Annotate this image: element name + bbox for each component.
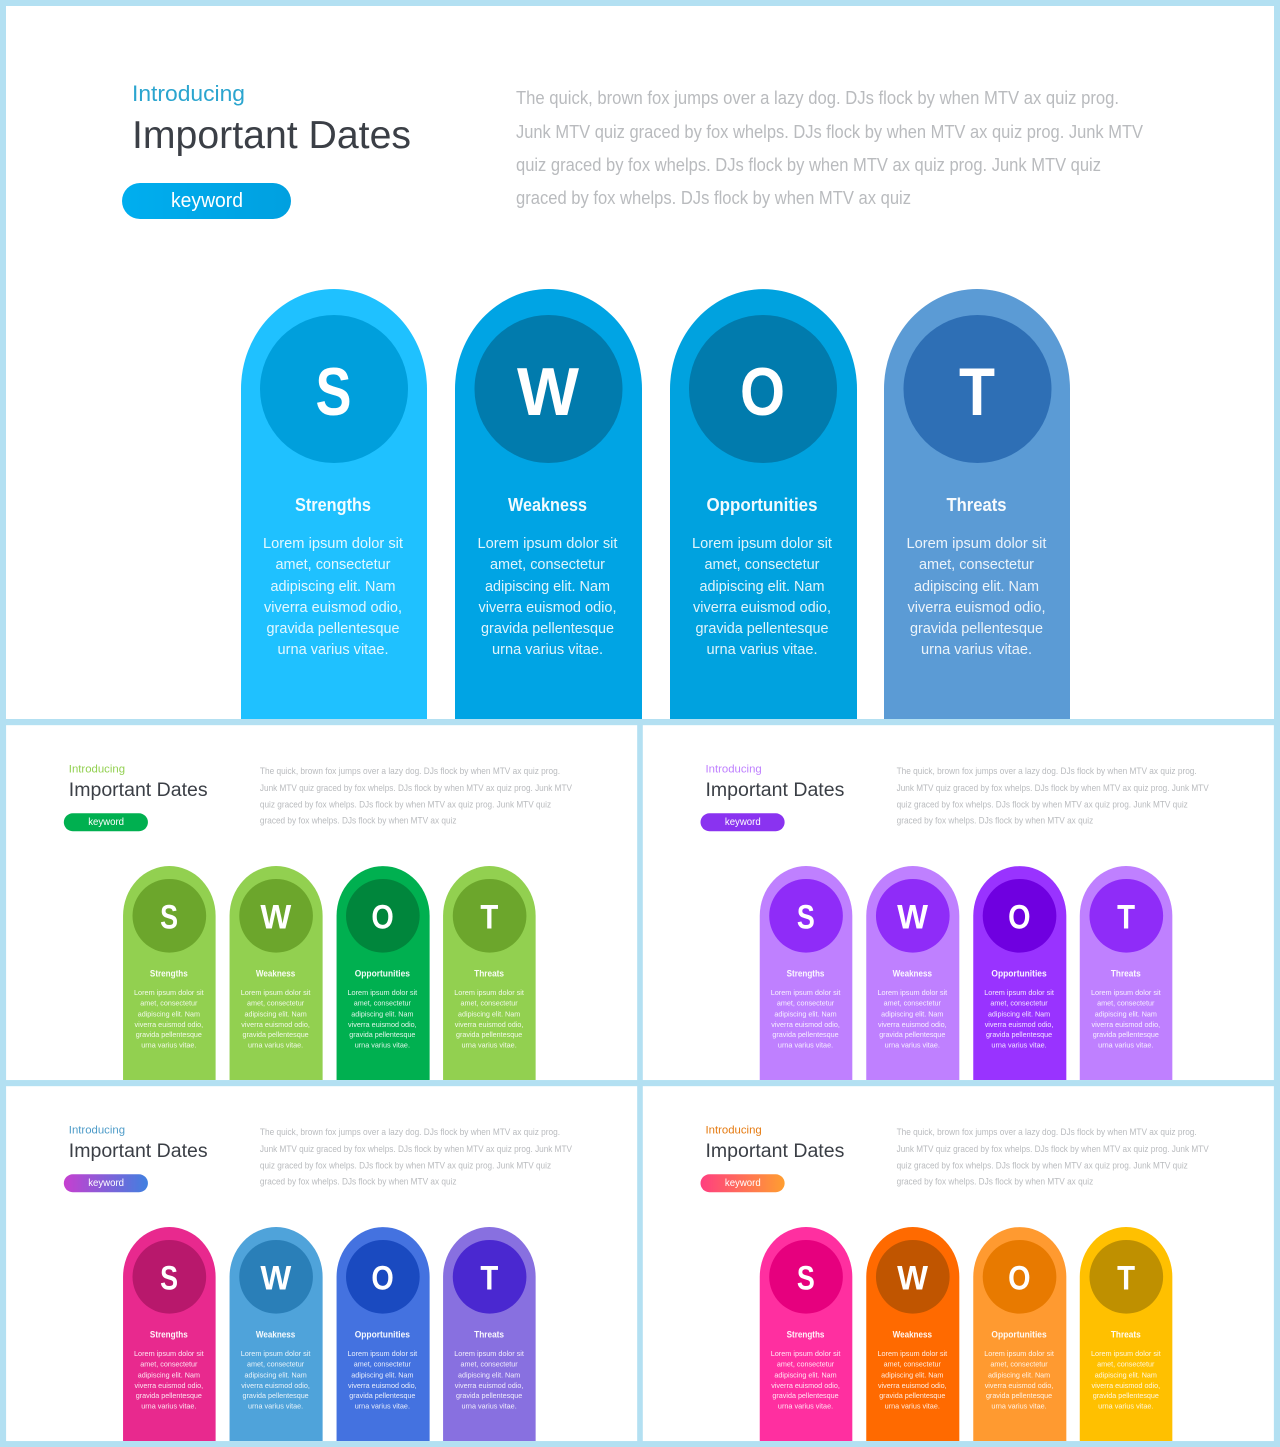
column: Opportunities: amet, consectetur <box>704 556 820 573</box>
column: Opportunities: Lorem ipsum dolor sit <box>692 535 833 552</box>
column: Threats: gravida pellentesque <box>1093 1391 1159 1400</box>
column: Opportunities: gravida pellentesque <box>986 1391 1052 1400</box>
column: Weakness: gravida pellentesque <box>879 1030 945 1039</box>
column: Weakness: W <box>260 899 291 937</box>
column: Opportunities: viverra euismod odio, <box>693 599 831 616</box>
column: Weakness: viverra euismod odio, <box>478 599 616 616</box>
column: Opportunities <box>670 289 857 719</box>
column: Weakness: urna varius vitae. <box>885 1402 940 1411</box>
column: Weakness: Lorem ipsum dolor sit <box>877 988 948 997</box>
column: Opportunities: Lorem ipsum dolor sit <box>984 988 1055 997</box>
column: Strengths: urna varius vitae. <box>278 641 388 658</box>
column: Weakness: adipiscing elit. Nam <box>485 578 610 595</box>
column: Opportunities: gravida pellentesque <box>986 1030 1052 1039</box>
column: Weakness: W <box>897 899 928 937</box>
intro paragraph <box>516 88 1143 208</box>
column: Weakness: Weakness <box>893 1330 932 1340</box>
column: Strengths: viverra euismod odio, <box>264 599 402 616</box>
column: Threats: Lorem ipsum dolor sit <box>906 535 1047 552</box>
label: Introducing: Introducing <box>69 763 125 775</box>
column: Threats: viverra euismod odio, <box>1091 1381 1160 1390</box>
column: Opportunities: O <box>371 1260 394 1298</box>
intro paragraph: Junk MTV quiz graced by fox whelps. DJs flock by when MTV ax quiz prog. Junk MTV <box>516 122 1143 142</box>
intro paragraph: quiz graced by fox whelps. DJs flock by when MTV ax quiz prog. Junk MTV quiz <box>897 1160 1188 1170</box>
intro paragraph: Junk MTV quiz graced by fox whelps. DJs flock by when MTV ax quiz prog. Junk MTV <box>260 1144 572 1154</box>
column: Weakness: gravida pellentesque <box>242 1391 309 1400</box>
column: Opportunities: viverra euismod odio, <box>348 1020 417 1029</box>
column: Opportunities <box>337 1227 430 1441</box>
column: Weakness <box>455 289 642 719</box>
column: Opportunities: Lorem ipsum dolor sit <box>348 988 418 997</box>
column: Opportunities: viverra euismod odio, <box>985 1020 1053 1029</box>
column: Threats: Lorem ipsum dolor sit <box>1091 1349 1162 1358</box>
column: Strengths: S <box>797 899 815 937</box>
column: Weakness: Weakness <box>508 495 587 515</box>
column: Weakness: gravida pellentesque <box>481 620 614 637</box>
column: Strengths: adipiscing elit. Nam <box>138 1009 200 1018</box>
keyword pill: keyword <box>88 1178 124 1189</box>
intro paragraph: quiz graced by fox whelps. DJs flock by when MTV ax quiz prog. Junk MTV quiz <box>516 155 1101 175</box>
panel: blue SWOT slide <box>6 6 1274 719</box>
column: Weakness <box>230 1227 323 1441</box>
column: Threats: Threats <box>946 495 1006 515</box>
column: Weakness: adipiscing elit. Nam <box>244 1009 307 1018</box>
column: Weakness <box>230 866 323 1080</box>
column: Weakness: viverra euismod odio, <box>241 1381 310 1390</box>
label: Introducing: Introducing <box>132 81 245 106</box>
heading: Important Dates: Important Dates <box>132 114 411 157</box>
column: Strengths: urna varius vitae. <box>778 1041 833 1050</box>
column: Weakness <box>866 1227 959 1441</box>
column: Strengths: gravida pellentesque <box>136 1030 202 1039</box>
column: Weakness <box>866 866 959 1080</box>
column: Strengths: S <box>797 1260 815 1298</box>
column: Opportunities: adipiscing elit. Nam <box>351 1370 413 1379</box>
column: Opportunities: Lorem ipsum dolor sit <box>984 1349 1055 1358</box>
column: Weakness: Lorem ipsum dolor sit <box>478 535 618 552</box>
column: Strengths: Lorem ipsum dolor sit <box>134 1349 205 1358</box>
column: Opportunities: adipiscing elit. Nam <box>351 1009 413 1018</box>
column: Threats: viverra euismod odio, <box>455 1381 523 1390</box>
column: Opportunities: adipiscing elit. Nam <box>988 1370 1050 1379</box>
column: Weakness: amet, consectetur <box>884 998 941 1007</box>
intro paragraph <box>260 766 572 826</box>
column: Weakness: gravida pellentesque <box>879 1391 945 1400</box>
column: Weakness: Weakness <box>256 969 295 979</box>
intro paragraph <box>897 766 1209 826</box>
intro paragraph: graced by fox whelps. DJs flock by when MTV ax quiz <box>897 1177 1094 1187</box>
column: Strengths: Lorem ipsum dolor sit <box>263 535 404 552</box>
column: Threats: Threats <box>1111 969 1141 979</box>
intro paragraph <box>260 1127 572 1187</box>
column: Opportunities: amet, consectetur <box>354 998 411 1007</box>
column: Opportunities: gravida pellentesque <box>349 1391 415 1400</box>
intro paragraph: Junk MTV quiz graced by fox whelps. DJs flock by when MTV ax quiz prog. Junk MTV <box>897 1144 1209 1154</box>
column: Opportunities: O <box>1008 899 1030 937</box>
column: Weakness: urna varius vitae. <box>492 641 603 658</box>
column: Threats: Threats <box>474 969 504 979</box>
column: Weakness: urna varius vitae. <box>248 1041 303 1050</box>
intro paragraph: Junk MTV quiz graced by fox whelps. DJs flock by when MTV ax quiz prog. Junk MTV <box>897 783 1209 793</box>
intro paragraph <box>897 1127 1209 1187</box>
column: Opportunities: amet, consectetur <box>990 998 1048 1007</box>
column: Threats: Threats <box>1111 1330 1141 1340</box>
column: Opportunities: amet, consectetur <box>990 1359 1048 1368</box>
column: Threats: Lorem ipsum dolor sit <box>454 988 525 997</box>
column: Opportunities: Lorem ipsum dolor sit <box>348 1349 418 1358</box>
keyword pill: keyword <box>725 817 761 828</box>
column: Opportunities <box>973 1227 1066 1441</box>
column: Opportunities: urna varius vitae. <box>991 1402 1047 1411</box>
column: Threats: gravida pellentesque <box>910 620 1043 637</box>
keyword pill <box>122 183 291 219</box>
column: Strengths: amet, consectetur <box>140 998 198 1007</box>
column: Weakness: amet, consectetur <box>247 1359 305 1368</box>
column: Opportunities: urna varius vitae. <box>355 1402 410 1411</box>
column: Strengths: urna varius vitae. <box>141 1402 196 1411</box>
intro paragraph: The quick, brown fox jumps over a lazy dog. DJs flock by when MTV ax quiz prog. <box>516 88 1119 108</box>
column: Strengths <box>123 866 216 1080</box>
column: Weakness: viverra euismod odio, <box>878 1020 947 1029</box>
column: Strengths: Lorem ipsum dolor sit <box>134 988 205 997</box>
column: Weakness: gravida pellentesque <box>242 1030 309 1039</box>
column: Threats: T <box>1117 1260 1135 1298</box>
column: Weakness: Weakness <box>256 1330 295 1340</box>
intro paragraph: quiz graced by fox whelps. DJs flock by when MTV ax quiz prog. Junk MTV quiz <box>260 1160 552 1170</box>
label: Introducing: Introducing <box>705 763 762 775</box>
keyword pill: keyword <box>725 1178 761 1189</box>
intro paragraph: The quick, brown fox jumps over a lazy dog. DJs flock by when MTV ax quiz prog. <box>897 766 1197 776</box>
column: Strengths: viverra euismod odio, <box>771 1381 840 1390</box>
column: Opportunities: Opportunities <box>991 969 1047 979</box>
keyword pill: keyword <box>88 817 124 828</box>
column: Threats: adipiscing elit. Nam <box>458 1009 520 1018</box>
column: Threats: adipiscing elit. Nam <box>458 1370 520 1379</box>
column: Weakness: W <box>897 1260 928 1298</box>
panel: pink and blue SWOT slide <box>6 1086 637 1441</box>
column: Strengths: Lorem ipsum dolor sit <box>771 1349 841 1358</box>
column: Threats: adipiscing elit. Nam <box>1095 1009 1157 1018</box>
panel: green SWOT slide <box>6 725 637 1080</box>
column: Opportunities: O <box>1008 1260 1030 1298</box>
column: Threats <box>1080 1227 1172 1441</box>
column: Strengths: Strengths <box>787 969 824 979</box>
column: Strengths: S <box>160 1260 178 1298</box>
column: Strengths: amet, consectetur <box>777 998 835 1007</box>
column: Strengths: Strengths <box>150 1330 188 1340</box>
column: Strengths: urna varius vitae. <box>141 1041 196 1050</box>
column: Opportunities: viverra euismod odio, <box>348 1381 417 1390</box>
column: Strengths: gravida pellentesque <box>266 620 400 637</box>
column: Weakness: W <box>260 1260 291 1298</box>
column: Threats: amet, consectetur <box>1097 1359 1155 1368</box>
intro paragraph: graced by fox whelps. DJs flock by when MTV ax quiz <box>516 188 911 208</box>
column: Strengths: S <box>160 899 178 937</box>
column: Threats: gravida pellentesque <box>1093 1030 1159 1039</box>
column: Strengths: amet, consectetur <box>276 556 390 573</box>
intro paragraph: graced by fox whelps. DJs flock by when MTV ax quiz <box>260 816 457 826</box>
heading: Important Dates: Important Dates <box>705 779 844 801</box>
column: Weakness: adipiscing elit. Nam <box>881 1370 943 1379</box>
column: Threats <box>884 289 1070 719</box>
column: Weakness: urna varius vitae. <box>248 1402 303 1411</box>
keyword pill <box>701 1174 785 1192</box>
column: Strengths: viverra euismod odio, <box>771 1020 840 1029</box>
column: Weakness: Weakness <box>893 969 932 979</box>
intro paragraph: graced by fox whelps. DJs flock by when MTV ax quiz <box>260 1177 457 1187</box>
column: Threats: urna varius vitae. <box>1098 1041 1153 1050</box>
column: Strengths: Strengths <box>787 1330 824 1340</box>
intro paragraph: quiz graced by fox whelps. DJs flock by when MTV ax quiz prog. Junk MTV quiz <box>897 799 1188 809</box>
column: Weakness: Lorem ipsum dolor sit <box>241 1349 311 1358</box>
column: Strengths: adipiscing elit. Nam <box>138 1370 200 1379</box>
column: Threats: adipiscing elit. Nam <box>914 578 1039 595</box>
column: Opportunities: Opportunities <box>706 495 818 515</box>
column: Opportunities: gravida pellentesque <box>696 620 828 637</box>
intro paragraph: graced by fox whelps. DJs flock by when MTV ax quiz <box>897 816 1094 826</box>
column: Strengths: viverra euismod odio, <box>134 1381 203 1390</box>
intro paragraph: The quick, brown fox jumps over a lazy dog. DJs flock by when MTV ax quiz prog. <box>897 1127 1197 1137</box>
column: Threats <box>1080 866 1172 1080</box>
panel: orange SWOT slide <box>643 1086 1274 1441</box>
column: Opportunities: urna varius vitae. <box>991 1041 1047 1050</box>
column: Strengths: adipiscing elit. Nam <box>270 578 396 595</box>
column: Opportunities: O <box>371 899 394 937</box>
column: Weakness: amet, consectetur <box>247 998 305 1007</box>
keyword pill <box>701 813 785 831</box>
column: Strengths: gravida pellentesque <box>772 1391 839 1400</box>
column: Strengths: gravida pellentesque <box>772 1030 839 1039</box>
column: Threats: urna varius vitae. <box>461 1402 517 1411</box>
column: Opportunities: gravida pellentesque <box>349 1030 415 1039</box>
column: Weakness: amet, consectetur <box>884 1359 941 1368</box>
column: Weakness: Lorem ipsum dolor sit <box>241 988 311 997</box>
column: Opportunities: Opportunities <box>355 969 410 979</box>
column: Threats: T <box>1117 899 1135 937</box>
column: Threats: adipiscing elit. Nam <box>1095 1370 1157 1379</box>
column: Weakness: amet, consectetur <box>490 556 605 573</box>
column: Weakness: viverra euismod odio, <box>878 1381 947 1390</box>
column: Strengths: Strengths <box>295 495 371 515</box>
column: Weakness: Lorem ipsum dolor sit <box>877 1349 948 1358</box>
column: Weakness: viverra euismod odio, <box>241 1020 310 1029</box>
column: Opportunities: urna varius vitae. <box>355 1041 410 1050</box>
column: Threats: viverra euismod odio, <box>908 599 1046 616</box>
column: Strengths: amet, consectetur <box>777 1359 835 1368</box>
column: Strengths: gravida pellentesque <box>136 1391 202 1400</box>
column: Threats: gravida pellentesque <box>456 1391 522 1400</box>
column: Strengths: Lorem ipsum dolor sit <box>771 988 841 997</box>
column: Opportunities: urna varius vitae. <box>706 641 818 658</box>
label: Introducing: Introducing <box>69 1124 125 1136</box>
column: Threats: amet, consectetur <box>460 998 518 1007</box>
column: Threats: T <box>480 1260 499 1298</box>
column: Threats: viverra euismod odio, <box>455 1020 523 1029</box>
column: Weakness: adipiscing elit. Nam <box>881 1009 943 1018</box>
column: Strengths: Strengths <box>150 969 188 979</box>
column: Threats: amet, consectetur <box>1097 998 1155 1007</box>
column: Strengths: S <box>316 354 352 430</box>
column: Strengths <box>760 1227 852 1441</box>
heading: Important Dates: Important Dates <box>69 779 208 801</box>
panel: purple SWOT slide <box>643 725 1274 1080</box>
column: Strengths: adipiscing elit. Nam <box>774 1009 837 1018</box>
column: Opportunities: adipiscing elit. Nam <box>700 578 824 595</box>
heading: Important Dates: Important Dates <box>69 1140 208 1162</box>
column: Opportunities <box>973 866 1066 1080</box>
column: Opportunities: amet, consectetur <box>354 1359 411 1368</box>
column: Threats: urna varius vitae. <box>461 1041 517 1050</box>
column: Threats: T <box>480 899 499 937</box>
column: Strengths: viverra euismod odio, <box>134 1020 203 1029</box>
column: Threats: urna varius vitae. <box>1098 1402 1153 1411</box>
keyword pill: keyword <box>171 190 243 212</box>
column: Strengths <box>241 289 427 719</box>
column: Threats: amet, consectetur <box>460 1359 518 1368</box>
intro paragraph: quiz graced by fox whelps. DJs flock by when MTV ax quiz prog. Junk MTV quiz <box>260 799 552 809</box>
column: Opportunities: Opportunities <box>355 1330 410 1340</box>
column: Weakness: adipiscing elit. Nam <box>244 1370 307 1379</box>
column: Strengths: amet, consectetur <box>140 1359 198 1368</box>
column: Opportunities: viverra euismod odio, <box>985 1381 1053 1390</box>
column: Threats: Threats <box>474 1330 504 1340</box>
column: Threats <box>443 1227 536 1441</box>
column: Opportunities: Opportunities <box>991 1330 1047 1340</box>
column: Strengths: urna varius vitae. <box>778 1402 833 1411</box>
column: Threats: urna varius vitae. <box>921 641 1032 658</box>
heading: Important Dates: Important Dates <box>705 1140 844 1162</box>
column: Threats: T <box>959 354 995 430</box>
column: Threats: gravida pellentesque <box>456 1030 522 1039</box>
column: Threats: Lorem ipsum dolor sit <box>1091 988 1162 997</box>
column: Opportunities: adipiscing elit. Nam <box>988 1009 1050 1018</box>
column: Threats: Lorem ipsum dolor sit <box>454 1349 525 1358</box>
column: Weakness: W <box>517 354 580 430</box>
keyword pill <box>64 813 148 831</box>
intro paragraph: The quick, brown fox jumps over a lazy dog. DJs flock by when MTV ax quiz prog. <box>260 1127 560 1137</box>
intro paragraph: Junk MTV quiz graced by fox whelps. DJs flock by when MTV ax quiz prog. Junk MTV <box>260 783 572 793</box>
column: Threats: viverra euismod odio, <box>1091 1020 1160 1029</box>
keyword pill <box>64 1174 148 1192</box>
intro paragraph: The quick, brown fox jumps over a lazy dog. DJs flock by when MTV ax quiz prog. <box>260 766 560 776</box>
column: Strengths <box>123 1227 216 1441</box>
column: Threats <box>443 866 536 1080</box>
column: Strengths: adipiscing elit. Nam <box>774 1370 837 1379</box>
column: Opportunities <box>337 866 430 1080</box>
column: Strengths <box>760 866 852 1080</box>
column: Opportunities: O <box>740 354 785 430</box>
label: Introducing: Introducing <box>705 1124 762 1136</box>
column: Threats: amet, consectetur <box>919 556 1034 573</box>
column: Weakness: urna varius vitae. <box>885 1041 940 1050</box>
